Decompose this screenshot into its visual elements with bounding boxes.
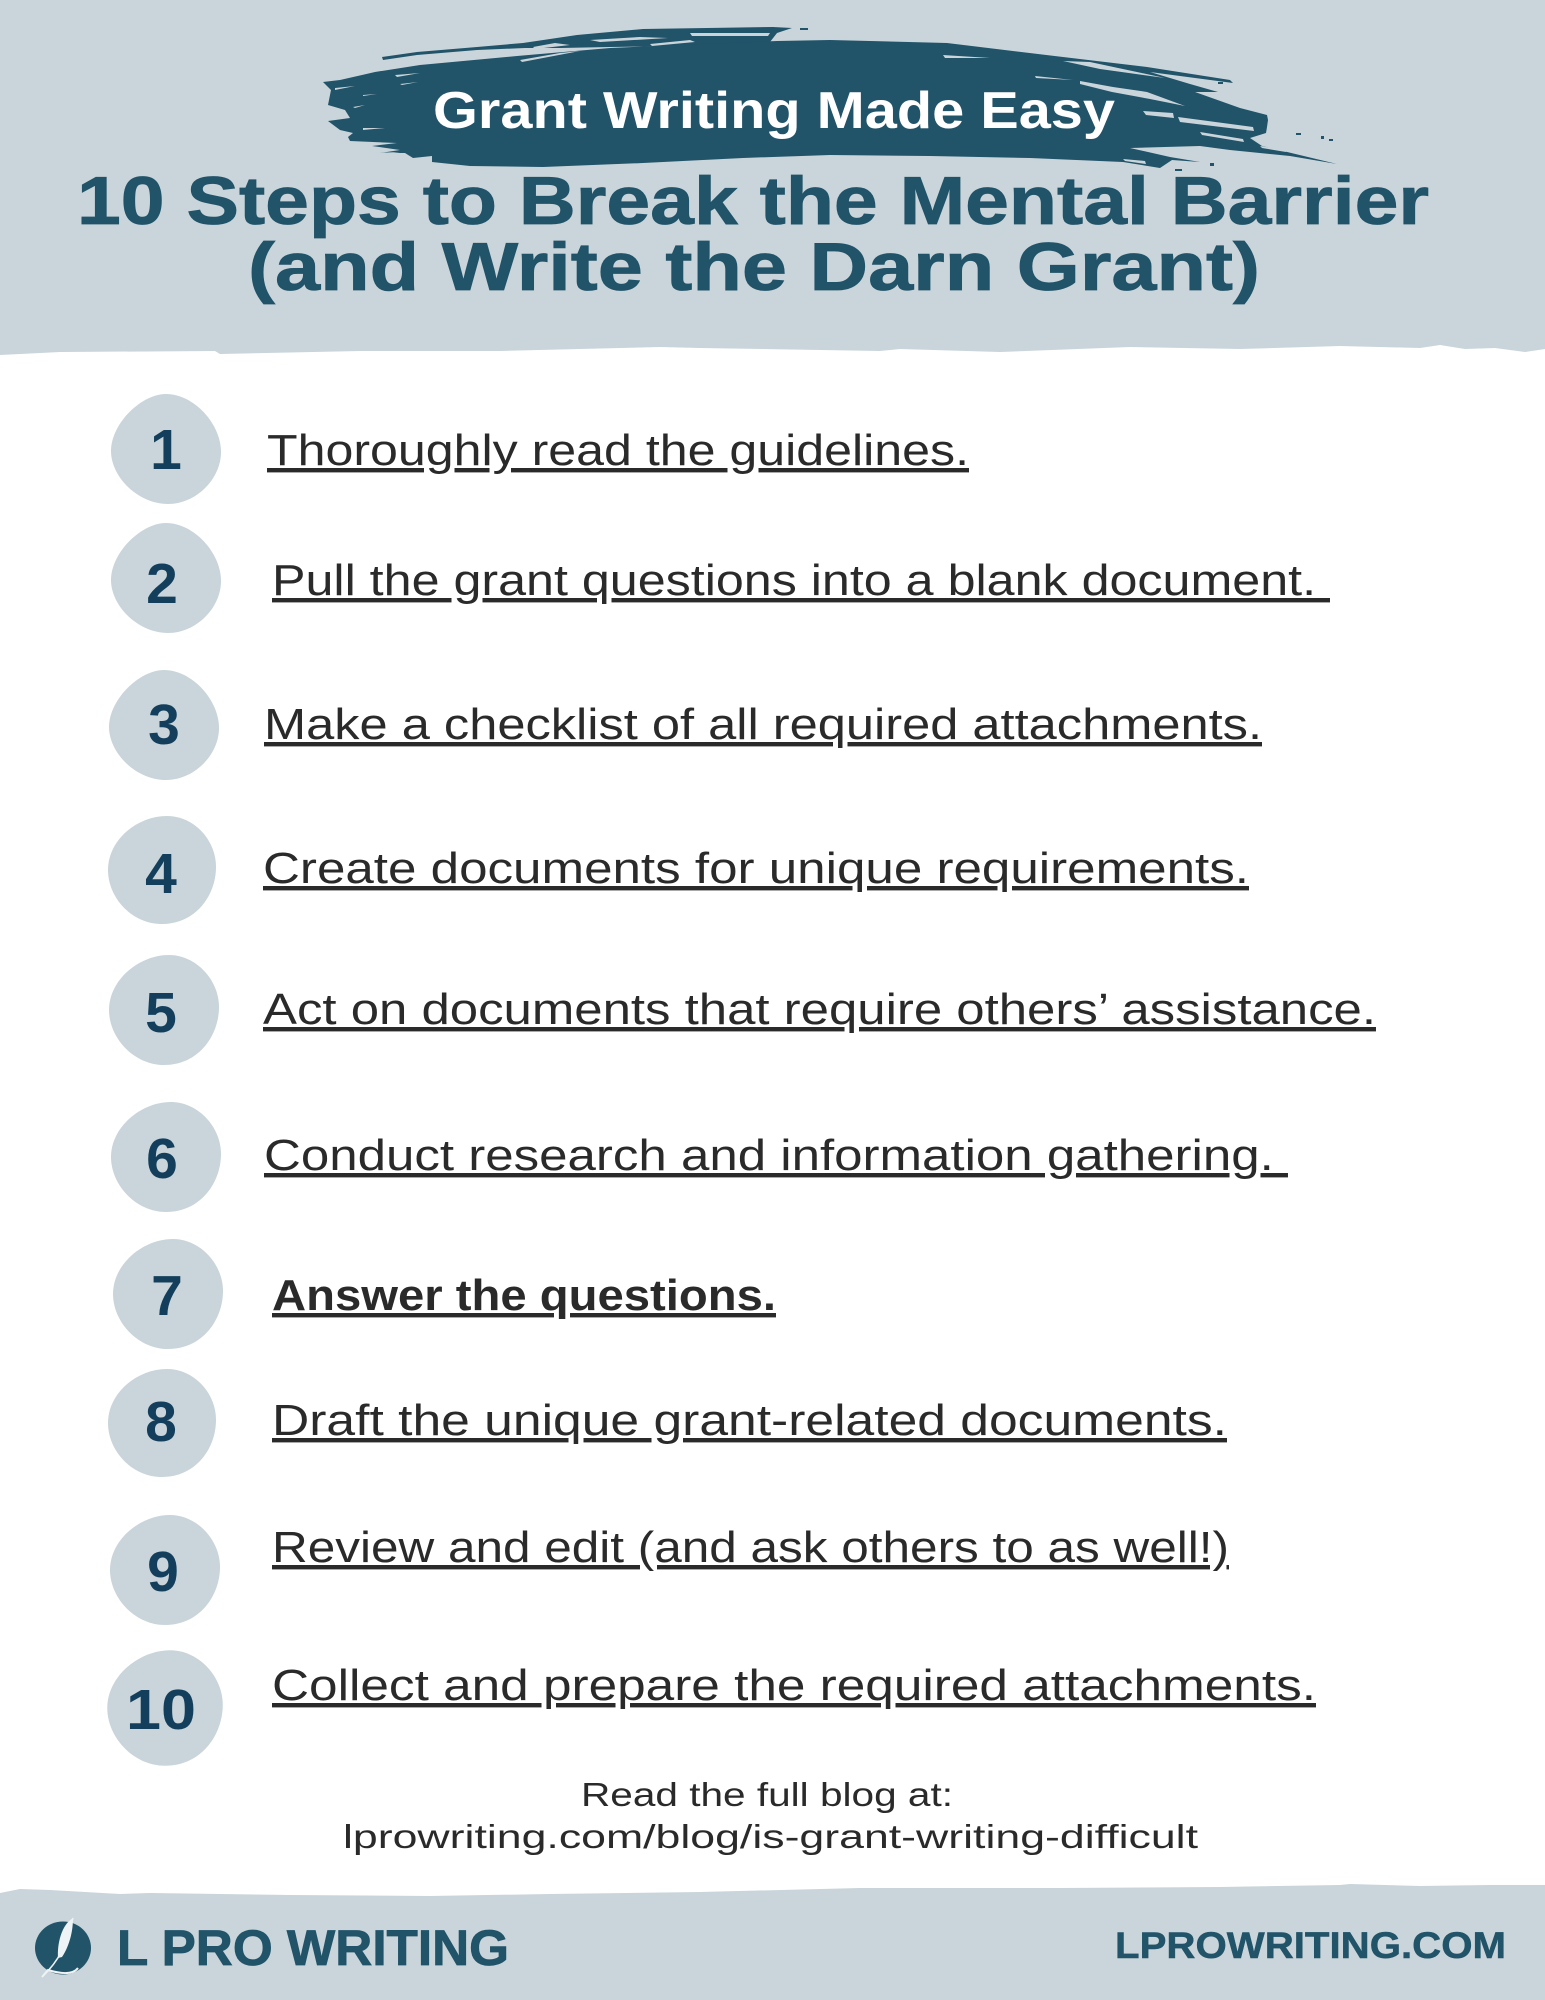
brush stroke behind subtitle bbox=[323, 27, 1337, 171]
step 8: Draft the unique grant-related documents. bbox=[272, 1396, 1227, 1445]
step 2: 2 bbox=[146, 552, 178, 616]
step 9: Review and edit (and ask others to as well!) bbox=[272, 1523, 1229, 1572]
title: (and Write the Darn Grant) bbox=[248, 229, 1260, 305]
step 2: Pull the grant questions into a blank document. bbox=[272, 556, 1330, 605]
blog link text: Read the full blog at: bbox=[581, 1776, 953, 1813]
step 8 bbox=[108, 1369, 1227, 1477]
step 6: Conduct research and information gathering. bbox=[264, 1131, 1288, 1180]
step 5: Act on documents that require others’ assistance. bbox=[263, 985, 1376, 1034]
step 5: 5 bbox=[145, 981, 177, 1045]
step 10 bbox=[107, 1650, 1316, 1766]
blog link text: lprowriting.com/blog/is-grant-writing-difficult bbox=[343, 1818, 1198, 1855]
step 10: Collect and prepare the required attachments. bbox=[272, 1661, 1316, 1710]
subtitle: Grant Writing Made Easy bbox=[433, 82, 1115, 140]
blog link text bbox=[343, 1776, 1198, 1855]
step 1: 1 bbox=[150, 418, 182, 482]
step 7 bbox=[113, 1239, 776, 1349]
step 1 bbox=[111, 394, 969, 504]
step 7: 7 bbox=[151, 1264, 183, 1328]
footer brand name: L PRO WRITING bbox=[117, 1920, 509, 1976]
step 1: Thoroughly read the guidelines. bbox=[267, 426, 969, 475]
step 4: Create documents for unique requirements. bbox=[263, 844, 1249, 893]
step 6 bbox=[111, 1102, 1288, 1212]
step 9: 9 bbox=[147, 1540, 179, 1604]
step 10: 10 bbox=[126, 1678, 196, 1742]
step 3: Make a checklist of all required attachments. bbox=[264, 700, 1262, 749]
step 2 bbox=[111, 523, 1330, 633]
step 9 bbox=[110, 1515, 1229, 1625]
step 5 bbox=[109, 955, 1376, 1065]
footer band bbox=[0, 1884, 1545, 2000]
header band bbox=[0, 0, 1545, 355]
logo icon: feather in circle bbox=[35, 1918, 91, 1977]
step 4 bbox=[108, 816, 1249, 924]
step 7: Answer the questions. bbox=[272, 1271, 776, 1320]
step 6: 6 bbox=[146, 1127, 178, 1191]
step 3 bbox=[109, 670, 1262, 780]
footer website: LPROWRITING.COM bbox=[1115, 1925, 1506, 1966]
step 4: 4 bbox=[145, 842, 177, 906]
title: 10 Steps to Break the Mental Barrier bbox=[77, 163, 1429, 239]
step 8: 8 bbox=[145, 1390, 177, 1454]
step 3: 3 bbox=[148, 693, 180, 757]
title bbox=[77, 163, 1429, 305]
